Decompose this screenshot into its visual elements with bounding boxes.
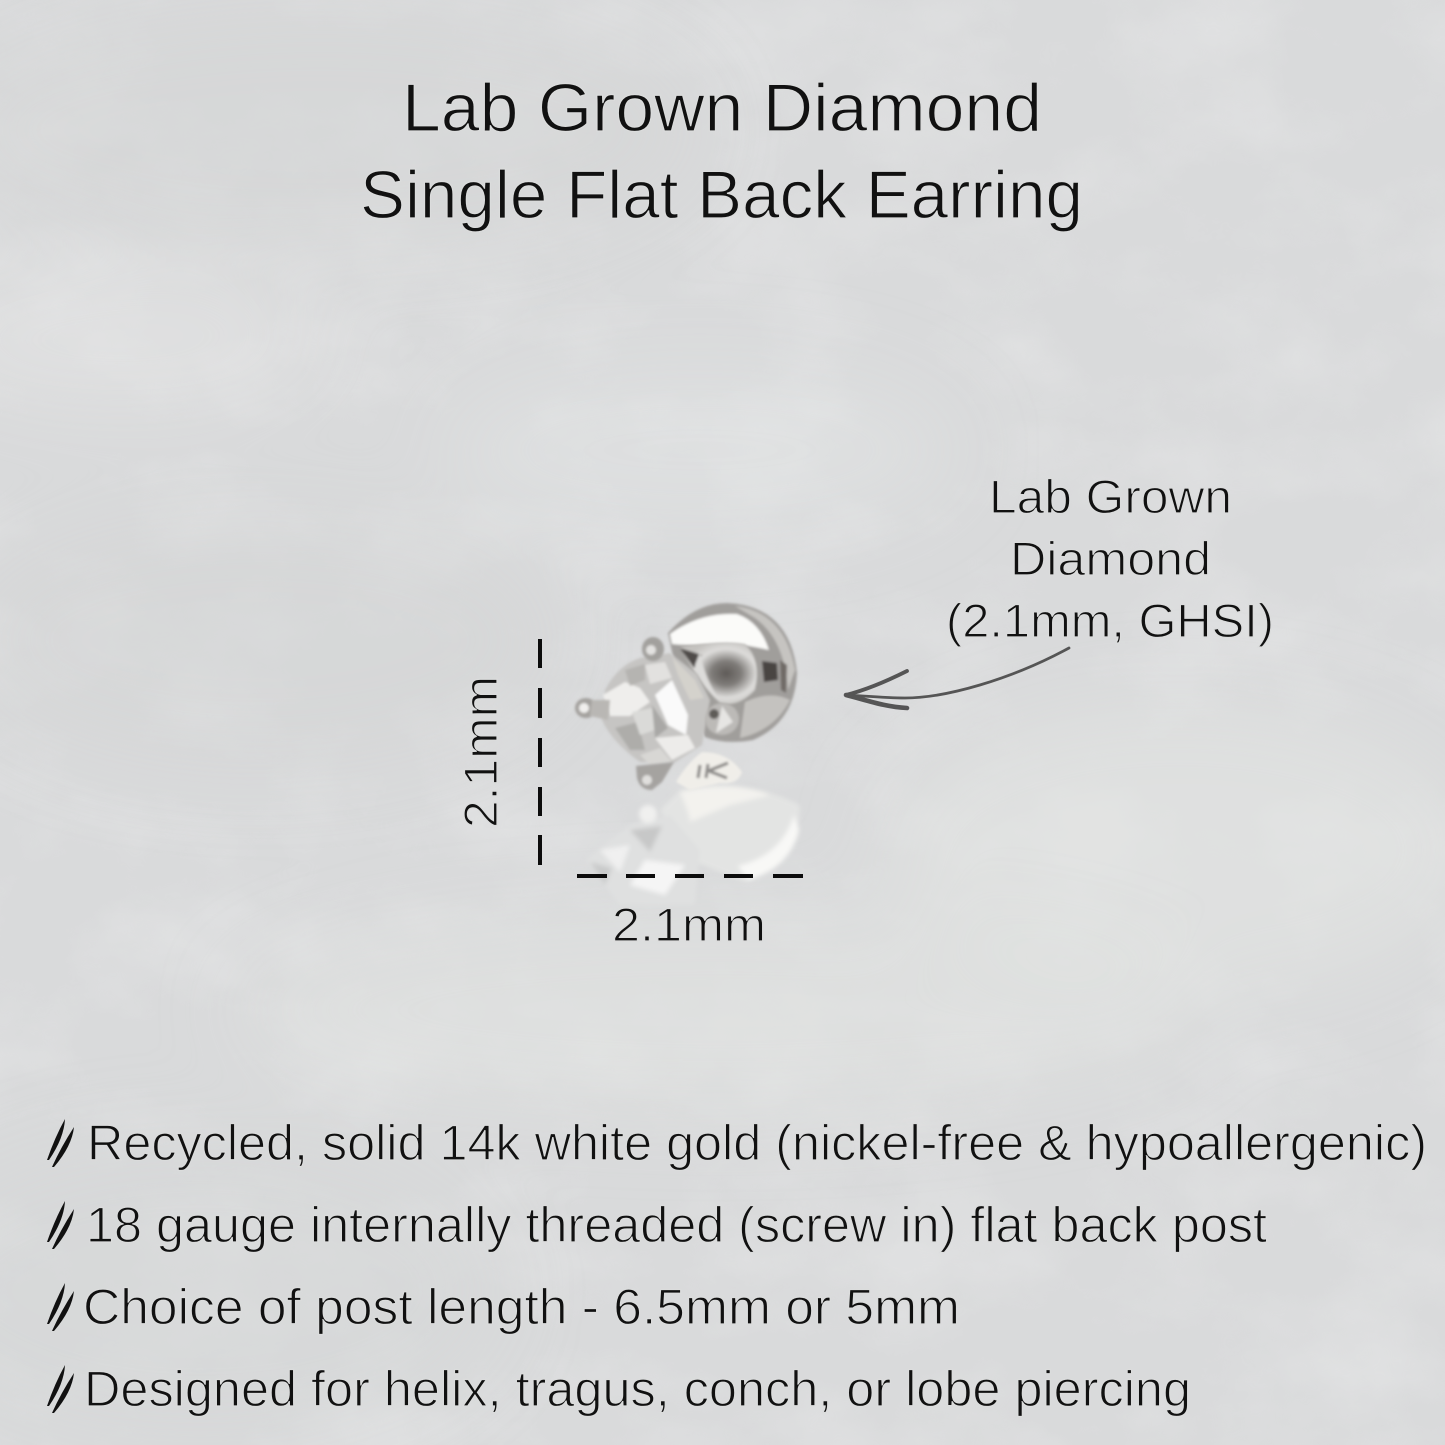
title: Lab Grown Diamond — [402, 70, 1042, 146]
diamond — [602, 653, 710, 765]
callout: lab grown diamond: (2.1mm, GHSI) — [946, 594, 1274, 647]
bullet item 1: Recycled, solid 14k white gold (nickel-free & hypoallergenic) — [87, 1115, 1427, 1171]
engraved 14K stamp — [676, 752, 742, 790]
callout: lab grown diamond: Diamond — [1010, 532, 1211, 585]
feature list — [47, 1115, 1427, 1417]
earring post — [680, 643, 757, 704]
horizontal dimension line — [577, 874, 803, 878]
bullet item 2: 18 gauge internally threaded (screw in) flat back post — [86, 1197, 1267, 1253]
prongs — [575, 637, 739, 790]
bullet item 4: Designed for helix, tragus, conch, or lobe piercing — [84, 1361, 1191, 1417]
reflection of earring — [585, 785, 800, 905]
callout: lab grown diamond: Lab Grown — [989, 470, 1232, 523]
callout: lab grown diamond — [946, 470, 1274, 647]
vertical dimension line — [538, 639, 542, 865]
bullet item 3: Choice of post length - 6.5mm or 5mm — [83, 1279, 960, 1335]
earring photo illustration — [575, 603, 800, 905]
arrow pointing to earring — [846, 648, 1069, 708]
height label: 2.1mm — [454, 676, 507, 828]
width label: 2.1mm — [612, 898, 766, 951]
title — [360, 70, 1083, 233]
title: Single Flat Back Earring — [360, 157, 1083, 233]
earring back disc — [668, 603, 797, 742]
